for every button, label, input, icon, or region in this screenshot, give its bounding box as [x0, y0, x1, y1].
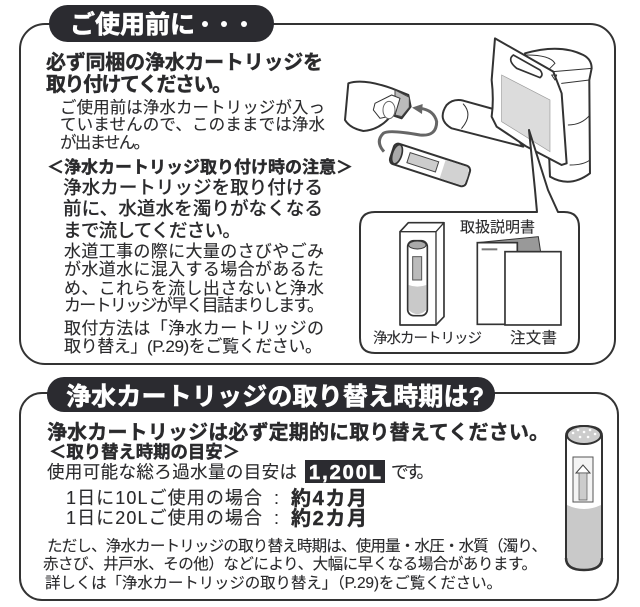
- text block: usage estimates: 約2カ月: [291, 507, 367, 530]
- text block: usage estimates: :: [274, 488, 279, 508]
- arrow: cartridge to mouthpiece: [379, 104, 437, 152]
- text block: attach the cartridge: [46, 51, 326, 152]
- label: manual: 取扱説明書: [460, 219, 535, 236]
- illustration: mouthpiece attachment: [345, 82, 411, 131]
- icon: cartridge: [566, 426, 602, 570]
- panel: before use: [20, 5, 615, 364]
- label: order form: 注文書: [510, 329, 557, 347]
- text block: installation caution: が水道水に混入する場合があるた: [64, 260, 324, 279]
- icon: boxed cartridge: [400, 223, 444, 325]
- heading pill: before use: [49, 5, 274, 42]
- text block: installation caution: 取付方法は「浄水カートリッジの: [64, 319, 324, 338]
- text block: usage estimates: :: [274, 508, 279, 528]
- illustration: faucet with bag: [443, 38, 592, 182]
- text block: usage estimates: [66, 487, 367, 530]
- text block: installation caution: 水道工事の際に大量のさびやごみ: [64, 242, 324, 261]
- text block: notes: 詳しくは「浄水カートリッジの取り替え」（P.29)をご覧ください。: [45, 574, 502, 592]
- text block: notes: ただし、浄水カートリッジの取り替え時期は、使用量・水圧・水質（濁り、: [47, 537, 547, 555]
- text block: installation caution: 取り替え」(P.29)をご覧ください。: [64, 337, 322, 356]
- text block: attach the cartridge: ご使用前は浄水カートリッジが入っ: [60, 98, 325, 117]
- panel: replacement timing: [20, 377, 618, 600]
- text block: installation caution: め、これらを流し出さないと浄水: [64, 279, 324, 298]
- heading pill: before use: ご使用前に: [70, 10, 195, 39]
- text block: installation caution: ＜浄水カートリッジ取り付け時の注意＞: [47, 158, 353, 177]
- text block: total filtered volume: です。: [391, 462, 434, 482]
- text block: usage estimates: 1日に20Lご使用の場合: [66, 508, 262, 528]
- text block: installation caution: 前に、水道水を濁りがなくなる: [63, 198, 323, 219]
- text block: replace regularly: 浄水カートリッジは必ず定期的に取り替えてください。: [47, 421, 549, 444]
- text block: usage estimates: 1日に10Lご使用の場合: [66, 488, 262, 508]
- icon: manual and order form: [477, 237, 561, 325]
- illustration: cartridge: [389, 142, 471, 187]
- text block: notes: 赤さび、井戸水、その他）などにより、大幅に早くなる場合があります。: [43, 555, 537, 573]
- label: cartridge: 浄水カートリッジ: [373, 330, 482, 347]
- text block: installation caution: [47, 158, 353, 356]
- text block: attach the cartridge: ていませんので、このままでは浄水: [60, 115, 326, 134]
- text block: attach the cartridge: 取り付けてください。: [46, 73, 232, 96]
- text block: installation caution: カートリッジが早く目詰まりします。: [64, 296, 324, 315]
- callout: included items: [360, 130, 579, 353]
- text block: notes: [43, 537, 547, 592]
- text block: attach the cartridge: が出ません。: [60, 133, 150, 152]
- text block: attach the cartridge: 必ず同梱の浄水カートリッジを: [46, 51, 323, 74]
- text block: total filtered volume: 使用可能な総ろ過水量の目安は: [47, 462, 297, 482]
- text block: usage estimates: 約4カ月: [291, 487, 367, 510]
- text block: installation caution: 浄水カートリッジを取り付ける: [63, 177, 323, 198]
- text block: total filtered volume: 1,200L: [309, 462, 381, 484]
- heading pill: replacement timing: 浄水カートリッジの取り替え時期は?: [66, 383, 484, 411]
- text block: guideline heading: ＜取り替え時期の目安＞: [49, 442, 240, 462]
- text block: total filtered volume: [47, 460, 434, 484]
- text block: installation caution: まで流してください。: [63, 220, 241, 241]
